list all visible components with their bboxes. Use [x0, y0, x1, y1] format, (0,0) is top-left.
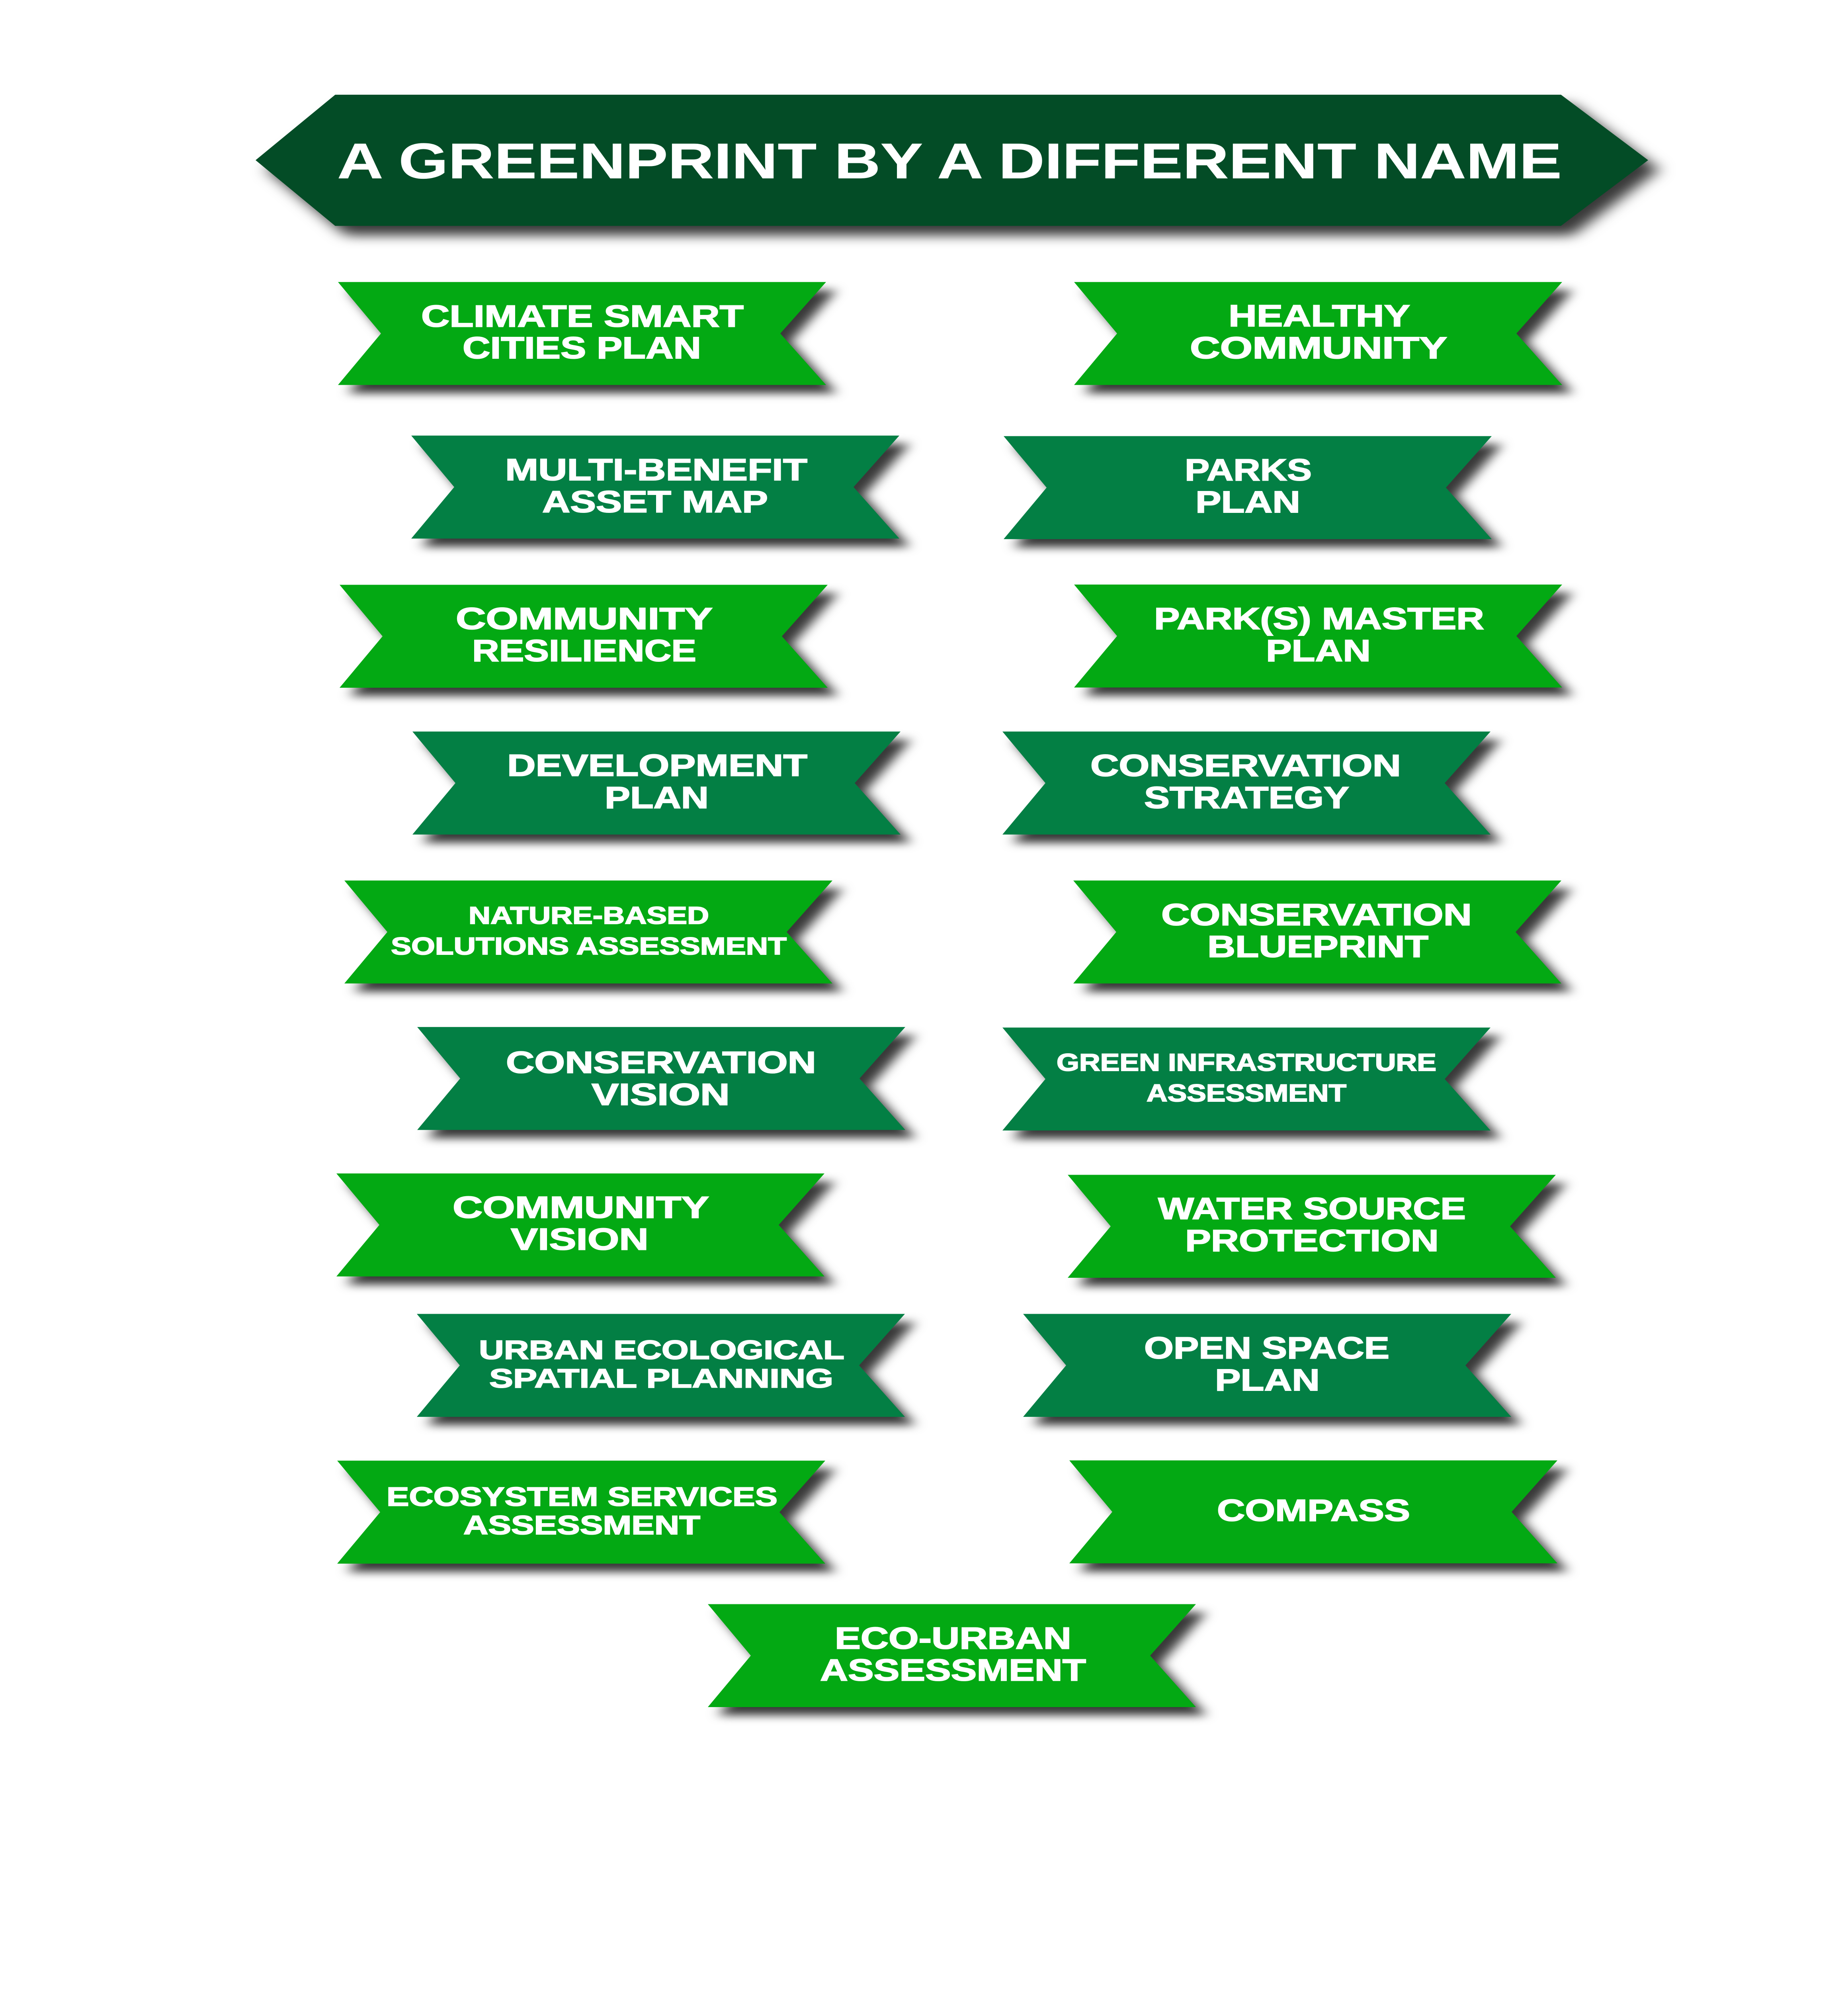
ribbon: climate smart cities plan: CLIMATE SMART — [421, 299, 744, 333]
ribbon: community vision — [336, 1173, 824, 1276]
ribbon: multi-benefit asset map — [411, 436, 899, 538]
ribbon: conservation vision: VISION — [592, 1078, 730, 1112]
ribbon: open space plan: OPEN SPACE — [1144, 1331, 1389, 1365]
title banner — [256, 95, 1648, 226]
ribbon: climate smart cities plan — [338, 282, 826, 385]
ribbon: nature-based solutions assessment: SOLUTIONS ASSESSMENT — [391, 933, 787, 960]
ribbon: conservation strategy — [1002, 731, 1491, 835]
ribbon: development plan: DEVELOPMENT — [507, 749, 807, 782]
ribbon: park(s) master plan: PARK(S) MASTER — [1154, 602, 1484, 636]
ribbon: compass — [1069, 1460, 1557, 1563]
ribbon: development plan: PLAN — [605, 781, 709, 815]
ribbon: open space plan — [1023, 1314, 1511, 1417]
ribbon: water source protection: PROTECTION — [1185, 1224, 1439, 1258]
ribbon: conservation blueprint: CONSERVATION — [1161, 898, 1472, 932]
ribbon: healthy community: COMMUNITY — [1190, 331, 1447, 365]
ribbon: community resilience — [340, 585, 828, 688]
ribbon: urban ecological spatial planning: SPATIAL PLANNING — [489, 1364, 833, 1393]
ribbon: climate smart cities plan: CITIES PLAN — [463, 331, 701, 365]
ribbon: compass: COMPASS — [1217, 1494, 1410, 1527]
ribbon: ecosystem services assessment: ASSESSMENT — [463, 1510, 700, 1540]
ribbon: conservation vision — [417, 1027, 905, 1130]
ribbon: community resilience: RESILIENCE — [472, 634, 696, 668]
ribbon: community vision: VISION — [511, 1222, 649, 1257]
ribbon: ecosystem services assessment — [337, 1461, 825, 1564]
ribbon: nature-based solutions assessment — [344, 880, 832, 984]
ribbon: eco-urban assessment — [708, 1604, 1196, 1707]
ribbon: conservation strategy: CONSERVATION — [1090, 749, 1401, 783]
ribbon: healthy community: HEALTHY — [1229, 299, 1410, 333]
ribbon: healthy community — [1074, 282, 1562, 385]
ribbon: ecosystem services assessment: ECOSYSTEM SERVICES — [387, 1482, 777, 1512]
ribbon: urban ecological spatial planning — [417, 1314, 905, 1417]
ribbon: parks plan: PARKS — [1185, 453, 1312, 487]
ribbon: community resilience: COMMUNITY — [456, 602, 713, 636]
ribbon: open space plan: PLAN — [1215, 1363, 1320, 1397]
ribbon: conservation vision: CONSERVATION — [506, 1046, 816, 1080]
ribbon: water source protection: WATER SOURCE — [1158, 1192, 1466, 1226]
ribbon: nature-based solutions assessment: NATURE-BASED — [469, 902, 709, 929]
ribbon: green infrastructure assessment — [1002, 1027, 1491, 1130]
ribbon: green infrastructure assessment: ASSESSMENT — [1147, 1080, 1346, 1107]
ribbon: development plan — [412, 731, 901, 835]
ribbon: multi-benefit asset map: ASSET MAP — [542, 485, 768, 519]
ribbon: park(s) master plan: PLAN — [1266, 634, 1371, 668]
ribbon: parks plan — [1004, 436, 1492, 539]
ribbon: green infrastructure assessment: GREEN INFRASTRUCTURE — [1057, 1049, 1436, 1076]
ribbon: conservation blueprint — [1073, 880, 1561, 984]
ribbon: park(s) master plan — [1074, 585, 1562, 687]
ribbon: eco-urban assessment: ECO-URBAN — [835, 1621, 1071, 1655]
ribbon: water source protection — [1068, 1175, 1556, 1278]
ribbon: eco-urban assessment: ASSESSMENT — [820, 1653, 1086, 1687]
ribbon: conservation strategy: STRATEGY — [1144, 781, 1349, 815]
ribbon: multi-benefit asset map: MULTI-BENEFIT — [505, 453, 807, 487]
ribbon: urban ecological spatial planning: URBAN ECOLOGICAL — [479, 1335, 844, 1365]
title: A GREENPRINT BY A DIFFERENT NAME — [337, 133, 1562, 189]
ribbon: parks plan: PLAN — [1196, 485, 1300, 519]
ribbon: community vision: COMMUNITY — [453, 1190, 709, 1224]
ribbon: conservation blueprint: BLUEPRINT — [1207, 930, 1428, 964]
